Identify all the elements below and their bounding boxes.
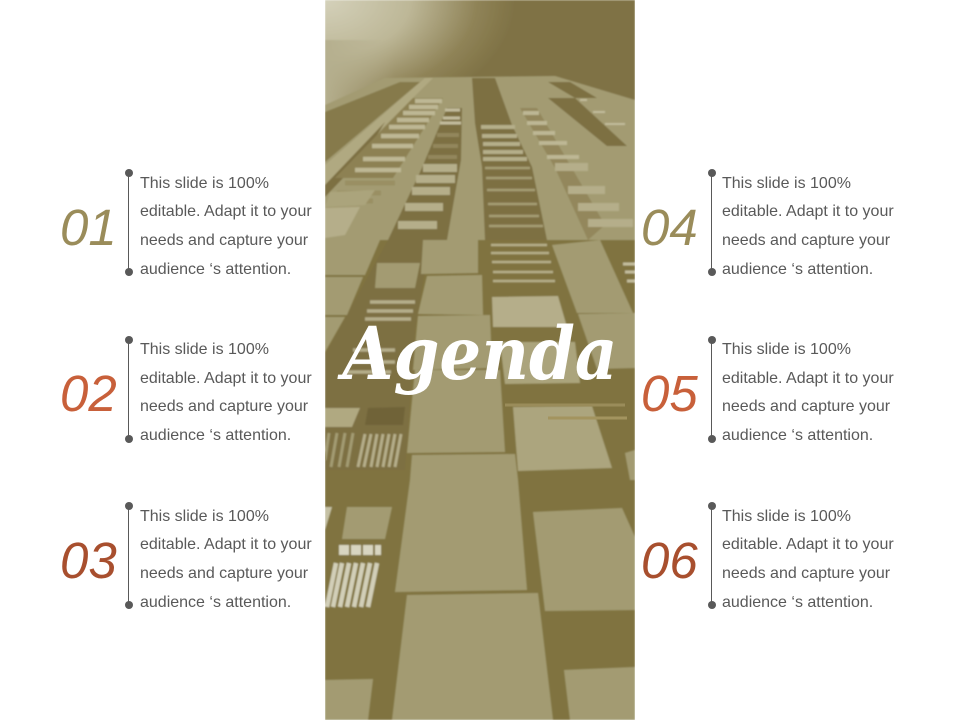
text 05: needs and capture your: [722, 398, 890, 415]
text 03: audience ‘s attention.: [140, 594, 291, 611]
text 02: audience ‘s attention.: [140, 427, 291, 444]
text 06: [722, 508, 894, 611]
text 05: audience ‘s attention.: [722, 427, 873, 444]
window rows: central strip: [481, 127, 527, 159]
agenda item 01: [60, 169, 312, 278]
agenda item 05: [641, 336, 894, 444]
text 04: needs and capture your: [722, 232, 890, 249]
text 01: needs and capture your: [140, 232, 308, 249]
photo: building looking upward, sepia tone: [325, 0, 635, 720]
left balconies: [345, 302, 415, 372]
agenda item 02: [60, 336, 312, 444]
window rows: centre-left strip: [440, 110, 461, 123]
brighter panels: [492, 296, 567, 327]
agenda item 03: [60, 502, 312, 611]
agenda item 04: [641, 169, 894, 278]
dark column, right middle: [480, 240, 635, 720]
lower-left panels in upper facade: [325, 190, 375, 207]
window rows: left strip: [355, 101, 442, 170]
dark window channels, upper facade: [325, 82, 420, 162]
text 04: audience ‘s attention.: [722, 261, 873, 278]
connector 02: [125, 336, 133, 443]
text 05: [722, 341, 894, 444]
text 02: needs and capture your: [140, 398, 308, 415]
number 06: 06: [641, 532, 698, 588]
text 03: [140, 508, 312, 611]
text 06: needs and capture your: [722, 565, 890, 582]
text 05: This slide is 100%: [722, 341, 851, 358]
text 04: [722, 174, 894, 278]
connector 04: [708, 169, 716, 276]
text 02: editable. Adapt it to your: [140, 370, 312, 387]
facade base: [325, 76, 635, 240]
text 04: This slide is 100%: [722, 174, 851, 192]
text 01: audience ‘s attention.: [140, 261, 291, 278]
window rows: right strip: [523, 113, 579, 157]
text 05: editable. Adapt it to your: [722, 370, 894, 387]
title: Agenda: [343, 311, 617, 397]
gold highlight lines: [505, 404, 625, 406]
large facade panels: [325, 240, 635, 720]
connector 05: [708, 336, 716, 443]
text 03: editable. Adapt it to your: [140, 536, 312, 553]
text 01: [140, 174, 312, 278]
text 06: audience ‘s attention.: [722, 594, 873, 611]
text 01: editable. Adapt it to your: [140, 203, 312, 220]
text 02: This slide is 100%: [140, 341, 269, 358]
text 03: This slide is 100%: [140, 508, 269, 524]
connector 06: [708, 502, 716, 609]
number 03: 03: [60, 532, 117, 588]
bright balcony at lower left: [339, 545, 381, 555]
central balconies: [491, 245, 555, 281]
connector 03: [125, 502, 133, 609]
number 02: 02: [60, 365, 117, 422]
text 01: This slide is 100%: [140, 174, 269, 192]
text 03: needs and capture your: [140, 565, 308, 582]
sky: [325, 0, 635, 120]
number 05: 05: [641, 365, 698, 422]
agenda item 06: [641, 502, 894, 611]
connector 01: [125, 169, 133, 276]
text 04: editable. Adapt it to your: [722, 203, 894, 220]
text 02: [140, 341, 312, 444]
text 06: editable. Adapt it to your: [722, 536, 894, 553]
number 01: 01: [60, 198, 117, 256]
text 06: This slide is 100%: [722, 508, 851, 524]
dark column, left middle: [325, 240, 430, 470]
number 04: 04: [641, 198, 698, 256]
